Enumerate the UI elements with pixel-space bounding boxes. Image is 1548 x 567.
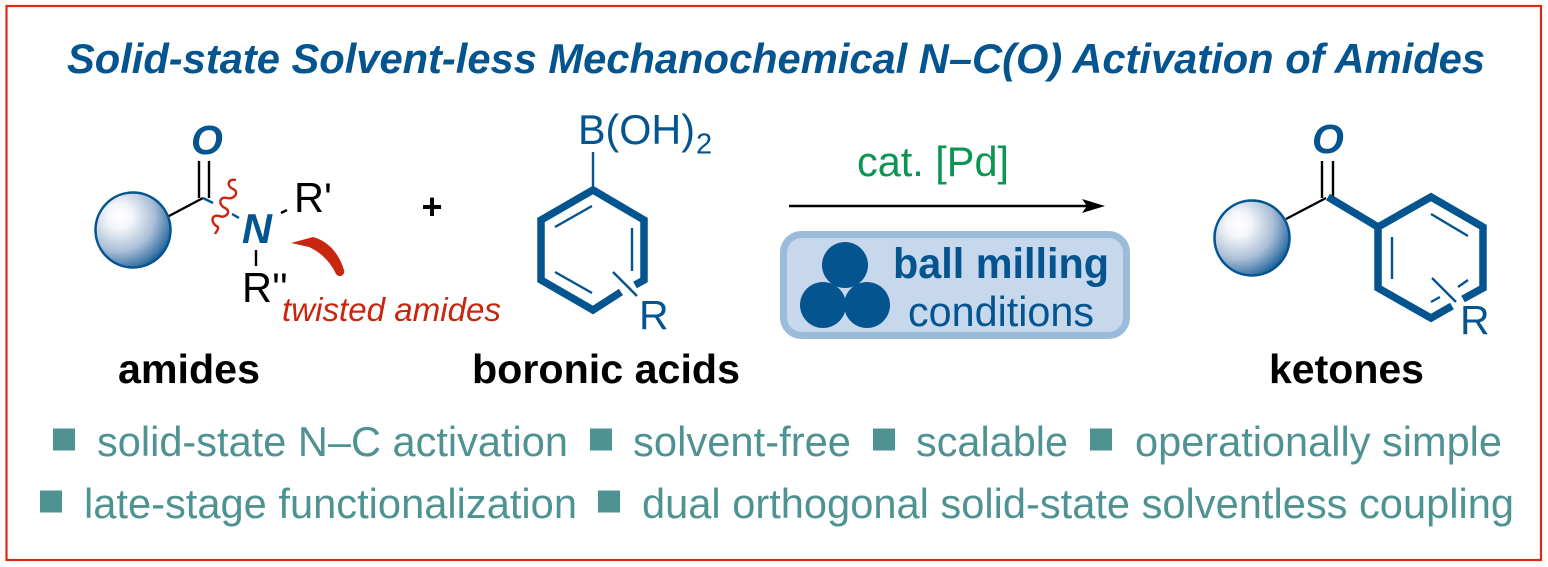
- feature: operationally simple: operationally simple: [1135, 418, 1502, 465]
- feature: dual orthogonal coupling: dual orthogonal solid-state solventless coupling: [642, 480, 1514, 527]
- thin bonds of ring: [555, 152, 637, 296]
- feature: scalable: scalable: [916, 418, 1068, 465]
- title: Solid-state Solvent-less Mechanochemical N–C(O) Activation of Amides: [67, 36, 1485, 82]
- panel: ball milling conditions: [784, 234, 1126, 336]
- boronic acid group label: B(OH): [578, 106, 695, 153]
- icon: substrate sphere: [1214, 200, 1290, 276]
- substituent R'': R'': [242, 264, 288, 311]
- subscript 2: 2: [696, 128, 712, 160]
- structure: boronic acid: [541, 106, 712, 338]
- curved twist arrow: [291, 237, 344, 276]
- amide nitrogen N: N: [242, 205, 273, 252]
- feature: solvent-free: solvent-free: [633, 418, 851, 465]
- bold benzene ring: [541, 190, 644, 310]
- feature: late-stage functionalization: late-stage functionalization: [84, 480, 577, 527]
- substituent R: R: [1460, 297, 1490, 343]
- wavy bond cleavage mark: [212, 180, 236, 234]
- substituent R: R: [639, 292, 669, 338]
- carbonyl and N bonds: [169, 161, 287, 266]
- plus sign: +: [421, 186, 443, 227]
- bold aryl bond and ring: [1328, 197, 1483, 318]
- carbonyl oxygen O: O: [191, 117, 223, 163]
- label: ketones: ketones: [1269, 346, 1424, 392]
- substituent R': R': [294, 174, 332, 221]
- twisted amides label: twisted amides: [282, 291, 501, 328]
- carbonyl bonds: [1286, 161, 1333, 219]
- feature list row 1: [53, 418, 1502, 465]
- reaction arrow: [789, 199, 1105, 213]
- label: boronic acids: boronic acids: [472, 346, 740, 392]
- icon: milling balls: [800, 242, 890, 328]
- structure: ketone product: [1214, 116, 1490, 343]
- feature: solid-state N–C activation: solid-state N–C activation: [97, 418, 568, 465]
- carbonyl oxygen O: O: [1312, 116, 1344, 162]
- icon: substrate sphere: [96, 192, 170, 268]
- label: amides: amides: [118, 346, 260, 392]
- structure: amide reactant: [96, 117, 501, 328]
- thin ring bonds: [1392, 214, 1468, 302]
- feature list row 2: [40, 480, 1514, 527]
- ball milling text: ball milling: [893, 240, 1109, 288]
- catalyst label: cat. [Pd]: [857, 139, 1009, 185]
- conditions text: conditions: [908, 289, 1094, 335]
